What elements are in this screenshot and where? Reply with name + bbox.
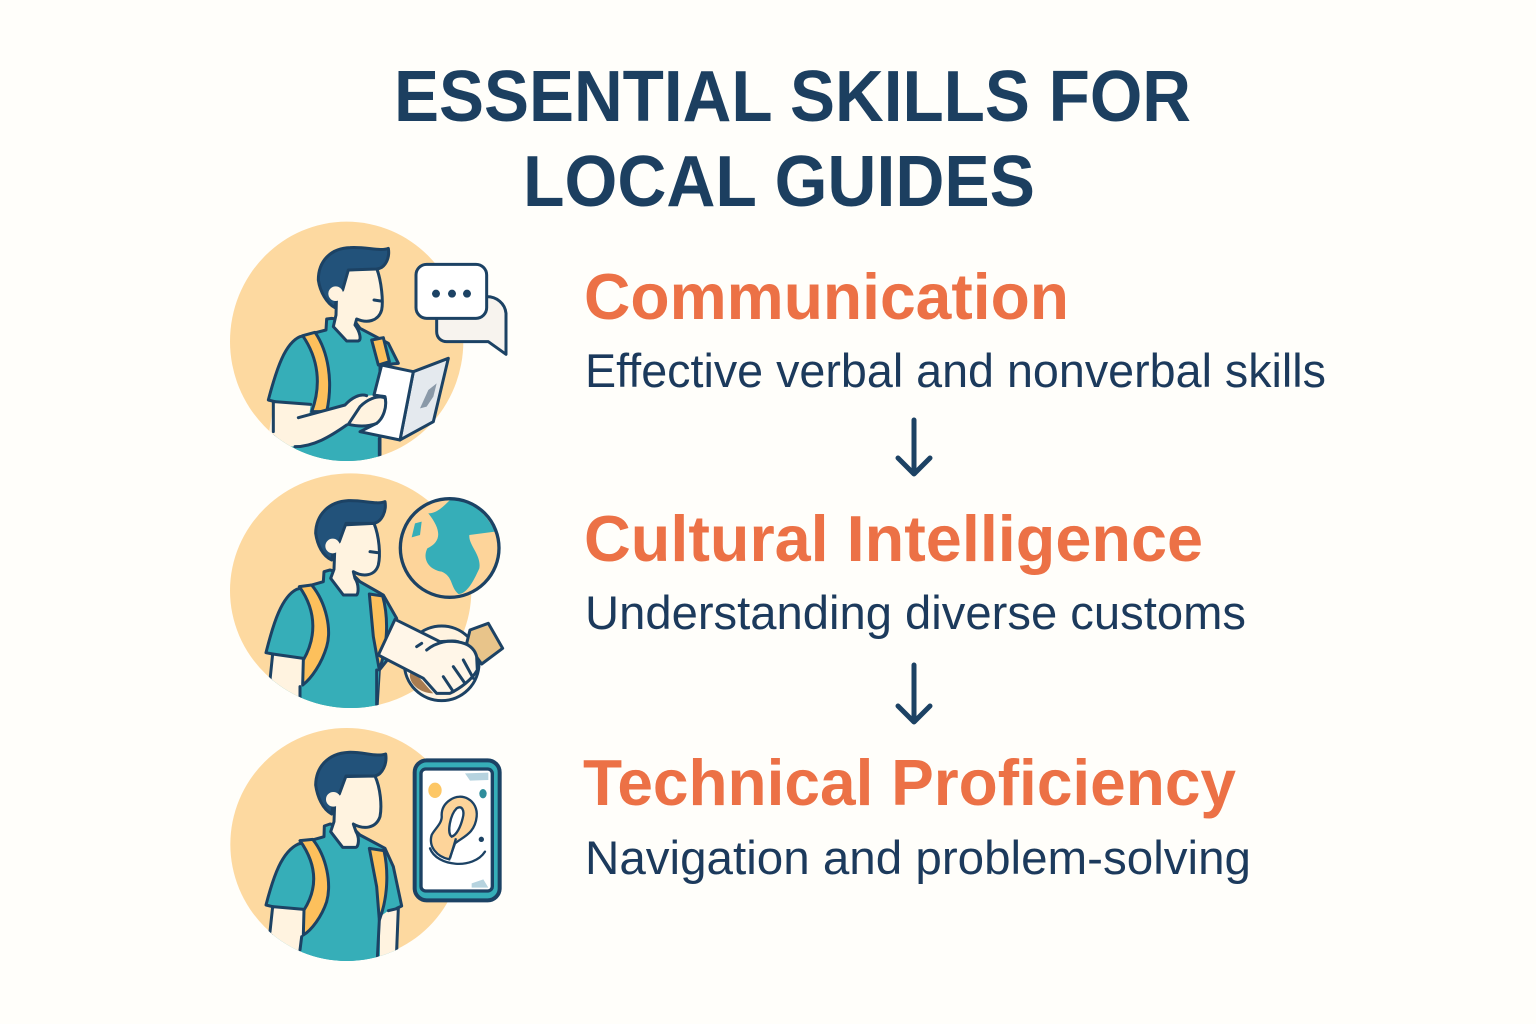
description: Communication: Effective verbal and nonverbal skills — [585, 344, 1326, 397]
arrow — [898, 665, 930, 722]
icon: smartphone with map — [415, 760, 500, 900]
title: LOCAL GUIDES — [523, 142, 1035, 222]
icon: speech bubbles — [416, 264, 506, 354]
arrow — [898, 420, 930, 474]
illustration: guide with globe and handshake — [230, 473, 503, 713]
illustration: guide with smartphone map — [230, 728, 500, 967]
icon: globe — [400, 499, 499, 597]
description: Technical Proficiency: Navigation and problem-solving — [585, 831, 1251, 884]
heading: Cultural Intelligence: Cultural Intelligence — [584, 502, 1203, 575]
title: ESSENTIAL SKILLS FOR — [394, 57, 1191, 137]
icon: handshake — [378, 619, 503, 701]
heading: Technical Proficiency: Technical Proficiency — [583, 746, 1236, 819]
heading: Communication: Communication — [584, 260, 1069, 333]
illustration: guide reading a map with speech bubbles — [230, 222, 506, 468]
title — [394, 57, 1191, 222]
description: Cultural Intelligence: Understanding diverse customs — [585, 586, 1246, 639]
